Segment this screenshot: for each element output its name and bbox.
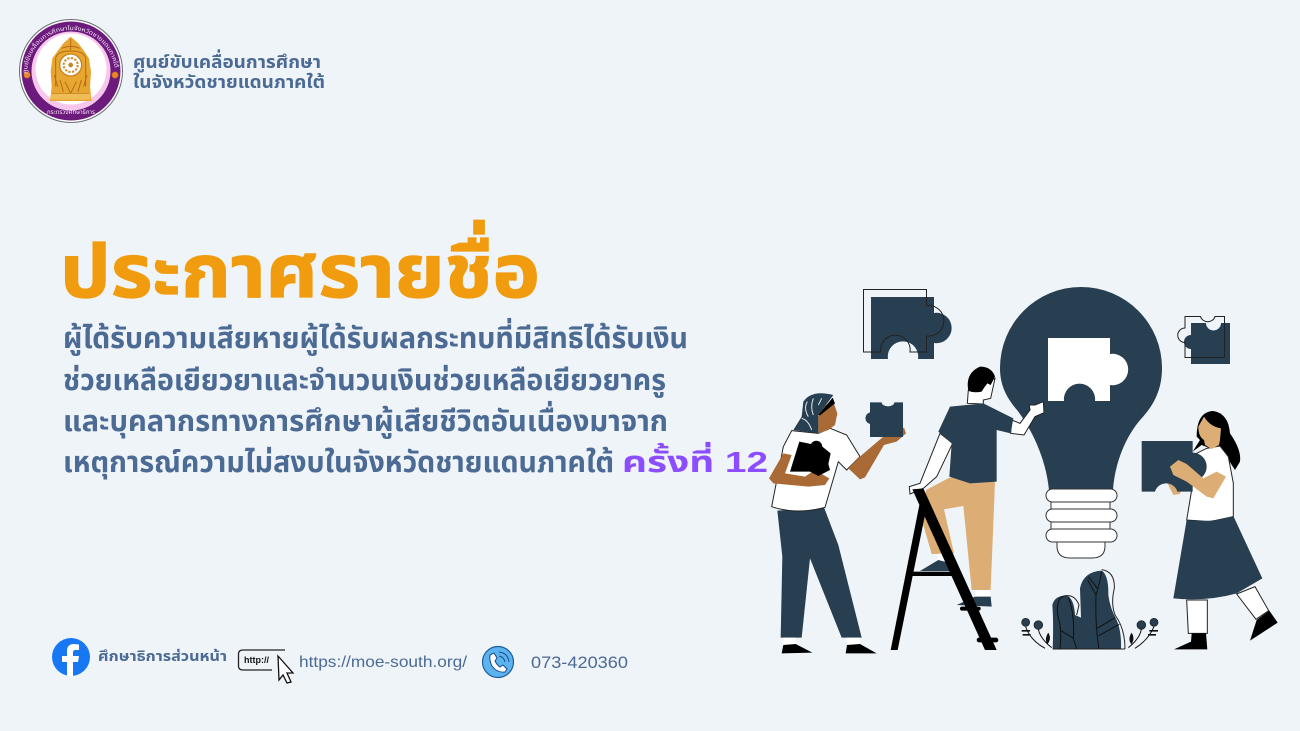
body text block: และบุคลากรทางการศึกษาผู้เสียชีวิตอันเนื่องมาจาก [63, 400, 668, 439]
illustration: team building lightbulb puzzle [769, 287, 1278, 653]
icon: website link with cursor [238, 650, 293, 683]
icon: facebook [52, 638, 90, 676]
icon: large puzzle piece, top left [864, 290, 952, 359]
website url: https://moe-south.org/ [299, 654, 468, 671]
logo: education ministry emblem: ศูนย์ขับเคลื่อนการศึกษาในจังหวัดชายแดนภาคใต้ [24, 25, 120, 74]
lightbulb [1000, 287, 1162, 558]
body text block: ช่วยเหลือเยียวยาและจำนวนเงินช่วยเหลือเยียวยาครู [63, 365, 666, 398]
icon: small puzzle piece, top right [1178, 316, 1230, 364]
body text block: เหตุการณ์ความไม่สงบในจังหวัดชายแดนภาคใต้ [63, 447, 614, 479]
person: woman carrying puzzle piece [1142, 411, 1278, 649]
person: man climbing ladder [891, 367, 1044, 650]
icon: website link with cursor: http:// [244, 655, 269, 665]
header: organisation name [133, 49, 325, 92]
logo: education ministry emblem [19, 19, 123, 123]
body text block: ครั้งที่ 12 [622, 441, 768, 479]
person: woman in headscarf holding puzzle pieces [769, 393, 906, 653]
facebook page name: ศึกษาธิการส่วนหน้า [98, 648, 227, 664]
body text block: ผู้ได้รับความเสียหายผู้ได้รับผลกระทบที่มีสิทธิได้รับเงิน [63, 317, 688, 356]
header: organisation name: ศูนย์ขับเคลื่อนการศึกษา [133, 49, 321, 73]
logo: education ministry emblem: กระทรวงศึกษาธิการ [47, 109, 95, 116]
body text block [63, 317, 768, 479]
header: organisation name: ในจังหวัดชายแดนภาคใต้ [133, 72, 325, 92]
title: ประกาศรายชื่อ [60, 220, 540, 313]
phone number: 073-420360 [531, 653, 628, 672]
icon: phone [482, 646, 514, 678]
plant with leaves and flowers [1022, 570, 1158, 649]
